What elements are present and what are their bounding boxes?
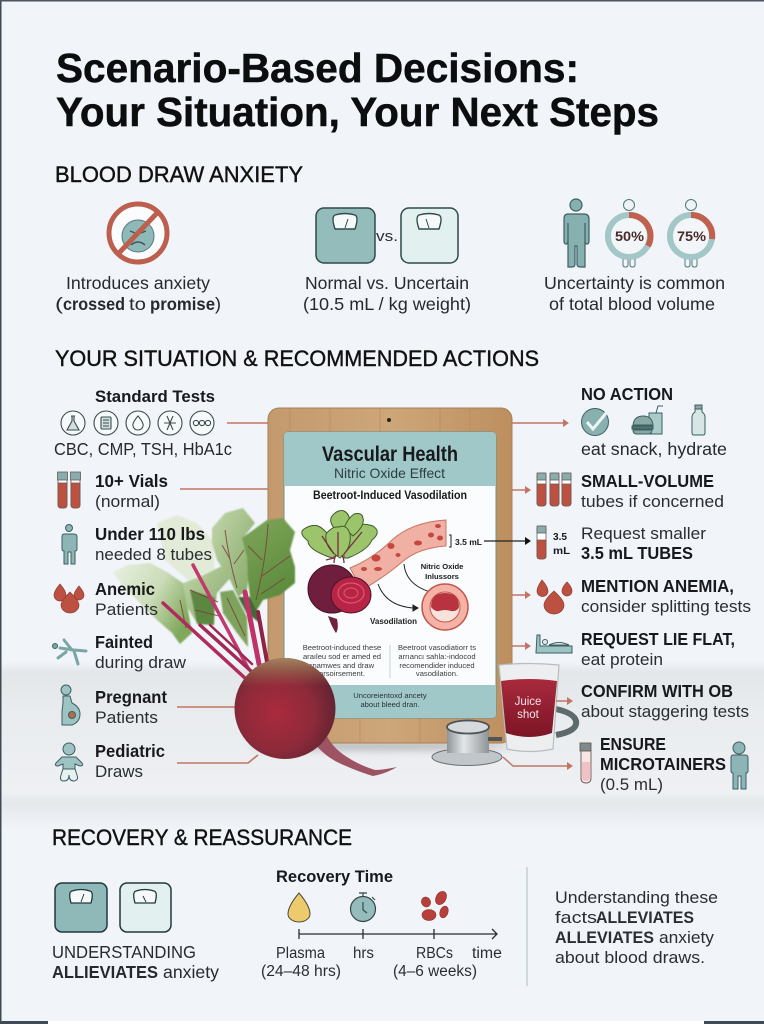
label: vs: vs. xyxy=(376,228,398,245)
right item: confirm with OB: about staggering tests xyxy=(581,702,749,721)
card text: left column: araıleu sod er amed ed xyxy=(303,652,381,661)
timeline labels: (24–48 hrs) xyxy=(261,963,341,980)
text: mention anemia xyxy=(581,576,751,616)
text: small volume xyxy=(581,471,724,511)
card footer text: Uncoreientoxd ancety xyxy=(353,691,427,700)
text: under 110 lbs: needed 8 tubes xyxy=(95,545,212,564)
card text: left column: Beetroot-induced these xyxy=(303,643,381,652)
card text: right column: Beetroot vasodiatiorr ts xyxy=(398,643,476,652)
text: understanding: anxiety xyxy=(163,962,219,982)
text: vials: (normal) xyxy=(95,492,160,511)
card heading xyxy=(322,443,458,481)
timeline labels: Plasma xyxy=(276,945,325,962)
icon: pregnant figure xyxy=(61,685,80,725)
icon: blood drops xyxy=(54,584,84,613)
right item: confirm with OB: CONFIRM WITH OB xyxy=(581,681,733,701)
card text: right column: vasodilation. xyxy=(416,669,458,678)
text: uncertainty xyxy=(544,273,725,314)
text: vials: 10+ Vials xyxy=(95,471,168,491)
label: nitric oxide: Nitric Oxide xyxy=(421,562,463,571)
text: request smaller: Request smaller xyxy=(581,524,706,543)
text: microtainers xyxy=(600,734,726,794)
text: lie flat: eat protein xyxy=(581,650,663,669)
chart: 50 percent donut xyxy=(608,200,651,267)
icon: crossed-out anxious face xyxy=(109,204,167,262)
right item: lie flat xyxy=(536,629,735,669)
icon: baby xyxy=(55,743,83,781)
beetroot with leaves xyxy=(113,508,397,776)
icon: stopwatch xyxy=(350,893,376,922)
juice label: shot xyxy=(517,709,540,721)
timeline labels xyxy=(261,945,502,980)
label: nitric oxide: Inlussors xyxy=(425,572,459,581)
panel: understanding xyxy=(52,883,219,982)
text: normal vs uncertain: (10.5 mL / kg weight) xyxy=(303,294,471,314)
icon: burger and drink xyxy=(632,406,663,434)
left item: under 110 lbs xyxy=(62,524,212,564)
text: lie flat xyxy=(581,629,735,669)
beet root xyxy=(311,732,397,776)
text: anemic xyxy=(95,579,158,619)
icon: bed xyxy=(536,635,572,653)
right item: anemia xyxy=(537,576,751,616)
juice glass xyxy=(499,664,559,752)
closing message: Understanding these xyxy=(555,888,718,907)
icon: person xyxy=(62,524,77,564)
arrows: right connectors xyxy=(503,419,573,770)
leaves xyxy=(113,508,295,647)
card text: right column: arrıancı sahla:-indocod xyxy=(398,652,476,661)
label: 3.5 mL xyxy=(553,532,570,557)
closing message xyxy=(555,888,718,967)
closing message: ALLEVIATES xyxy=(596,908,694,927)
text: test list: CBC, CMP, TSH, HbA1c xyxy=(54,439,232,459)
heading: no action: NO ACTION xyxy=(581,384,673,404)
panel: recovery time xyxy=(261,867,502,980)
card text: left column: orsoirsement. xyxy=(319,669,365,678)
contact shadow xyxy=(250,742,510,750)
illustration: vessel cross-section xyxy=(422,584,468,630)
title xyxy=(56,45,659,135)
timeline labels: RBCs xyxy=(416,945,453,962)
text: pediatric xyxy=(95,741,165,781)
chart: 50 percent donut: 50% xyxy=(615,228,645,244)
text: anemic: Patients xyxy=(95,600,158,619)
icon: normal scale xyxy=(316,208,375,263)
section heading: blood draw anxiety: BLOOD DRAW ANXIETY xyxy=(55,162,303,187)
text: introduces anxiety: to xyxy=(129,294,146,314)
text: pediatric: Draws xyxy=(95,762,143,781)
left item: anemic xyxy=(54,579,158,619)
illustration: beet with vessel xyxy=(302,511,446,633)
icon: microtainer xyxy=(580,743,591,783)
section heading: your situation: YOUR SITUATION & RECOMMENDED ACTIONS xyxy=(55,346,539,371)
closing message: ALLEVIATES xyxy=(555,928,654,947)
section heading: recovery: RECOVERY & REASSURANCE xyxy=(52,825,352,850)
icon: falling person xyxy=(52,640,86,664)
label: 3.5 mL bracket: 3.5 mL xyxy=(455,537,482,547)
closing message: anxiety xyxy=(659,928,714,947)
left item: pregnant xyxy=(61,685,167,727)
text: lie flat: REQUEST LIE FLAT, xyxy=(581,629,735,649)
arrows: to vessel section xyxy=(378,564,437,611)
connector lines: left xyxy=(177,423,268,763)
juice label: Juice xyxy=(515,696,541,708)
text: introduces anxiety: promise xyxy=(150,294,215,314)
card footer text: about bleed dran. xyxy=(360,700,420,709)
icon: check mark xyxy=(582,408,608,436)
text: microtainers: ENSURE xyxy=(600,734,666,754)
closing message: about blood draws. xyxy=(555,948,705,967)
text: uncertainty: Uncertainty is common xyxy=(544,273,725,293)
icons: lab test circles xyxy=(61,411,214,435)
closing message: facts xyxy=(555,908,597,927)
chart: 75 percent donut: 75% xyxy=(677,228,707,244)
left column: standard tests xyxy=(54,387,232,459)
text: mention anemia: MENTION ANEMIA, xyxy=(581,576,734,596)
text: small volume: SMALL-VOLUME xyxy=(581,471,714,491)
panel: normal vs uncertain xyxy=(303,208,471,314)
text: normal vs uncertain: Normal vs. Uncertain xyxy=(305,273,469,293)
text: pediatric: Pediatric xyxy=(95,741,165,761)
beet slice xyxy=(331,577,371,613)
text: introduces anxiety: ( xyxy=(55,294,63,314)
text: pregnant: Patients xyxy=(95,708,158,727)
panel: blood volume figures xyxy=(544,199,725,314)
arrow: 3.5 mL to tube xyxy=(484,537,531,545)
text: eat snack: eat snack, hydrate xyxy=(581,439,727,459)
icon: water bottle xyxy=(692,405,705,435)
text: fainted xyxy=(95,632,187,672)
text: pregnant xyxy=(95,687,167,727)
title: Your Situation, Your Next Steps xyxy=(56,89,659,135)
icon: uncertain scale xyxy=(401,208,458,263)
leaves xyxy=(302,511,377,558)
icon: filled scale xyxy=(55,883,107,932)
text: uncertainty: of total blood volume xyxy=(549,294,715,314)
label: 3.5 mL: mL xyxy=(553,546,570,557)
small beet root xyxy=(328,616,338,633)
text: under 110 lbs: Under 110 lbs xyxy=(95,524,205,544)
left item: fainted xyxy=(52,632,187,672)
timeline labels: (4–6 weeks) xyxy=(393,963,477,980)
icon: two vials xyxy=(58,472,80,508)
text: understanding: ALLIEVIATES xyxy=(52,962,158,982)
card heading: Vascular Health xyxy=(322,443,458,466)
text: vials xyxy=(95,471,168,511)
icon: person xyxy=(564,199,589,267)
text: introduces anxiety: crossed xyxy=(63,294,125,314)
left item: vials xyxy=(58,471,168,511)
heading: recovery time: Recovery Time xyxy=(276,867,393,886)
text: understanding xyxy=(52,942,219,982)
right item: smaller tubes xyxy=(537,524,706,563)
text: microtainers: (0.5 mL) xyxy=(600,775,663,794)
right item: small volume xyxy=(537,471,724,511)
card heading: Nitric Oxide Effect xyxy=(334,465,445,481)
icon: small tube xyxy=(537,526,546,559)
stems xyxy=(163,565,267,679)
timeline labels: hrs xyxy=(353,945,374,962)
label: 3.5 mL: 3.5 xyxy=(553,532,567,543)
stethoscope xyxy=(432,709,576,766)
label: vasodilation: Vasodilation xyxy=(370,617,417,626)
text: small volume: tubes if concerned xyxy=(581,492,724,511)
text: introduces anxiety: Introduces anxiety xyxy=(66,273,210,293)
juice label xyxy=(515,696,541,721)
card text: right column xyxy=(398,643,476,678)
title: Scenario-Based Decisions: xyxy=(56,45,579,91)
card footer text xyxy=(353,691,427,709)
text: normal vs uncertain xyxy=(303,273,471,314)
card text: left column xyxy=(303,643,381,678)
wooden clipboard panel xyxy=(268,408,512,743)
heading: standard tests: Standard Tests xyxy=(95,387,215,406)
icon: light scale xyxy=(120,883,171,932)
card text: left column: rnamwes and draw xyxy=(310,661,375,670)
right item: no action xyxy=(581,384,727,459)
icon: child figure xyxy=(731,742,748,789)
icon: red blood cells xyxy=(420,889,450,920)
label: nitric oxide xyxy=(421,562,463,581)
chart: 75 percent donut xyxy=(670,200,712,267)
text: understanding: UNDERSTANDING xyxy=(52,942,196,962)
text: fainted: during draw xyxy=(95,653,187,672)
text: anemic: Anemic xyxy=(95,579,155,599)
timeline axis xyxy=(299,929,497,939)
text: request smaller: 3.5 mL TUBES xyxy=(581,543,693,563)
icon: plasma drop xyxy=(288,893,310,922)
icon: drops xyxy=(537,580,572,614)
table surface xyxy=(0,662,764,830)
right item: microtainers xyxy=(580,734,748,794)
card text: right column: recomendider induced xyxy=(399,661,475,670)
label: 3.5 mL bracket xyxy=(449,535,482,547)
vascular card xyxy=(284,432,496,718)
timeline labels: time xyxy=(472,945,502,962)
text: under 110 lbs xyxy=(95,524,212,564)
text: request smaller xyxy=(581,524,706,563)
text: pregnant: Pregnant xyxy=(95,687,167,707)
text: microtainers: MICROTAINERS xyxy=(600,754,726,774)
icon: three tubes xyxy=(537,473,571,506)
text: fainted: Fainted xyxy=(95,632,153,652)
left item: pediatric xyxy=(55,741,165,781)
panel: anxiety item xyxy=(55,204,221,314)
card subheading: Beetroot-Induced Vasodilation xyxy=(313,490,467,502)
text: mention anemia: consider splitting tests xyxy=(581,597,751,616)
text: introduces anxiety: ) xyxy=(215,294,221,314)
text: introduces anxiety xyxy=(55,273,221,314)
blood vessel xyxy=(350,520,446,590)
right item: confirm with OB xyxy=(581,681,749,721)
